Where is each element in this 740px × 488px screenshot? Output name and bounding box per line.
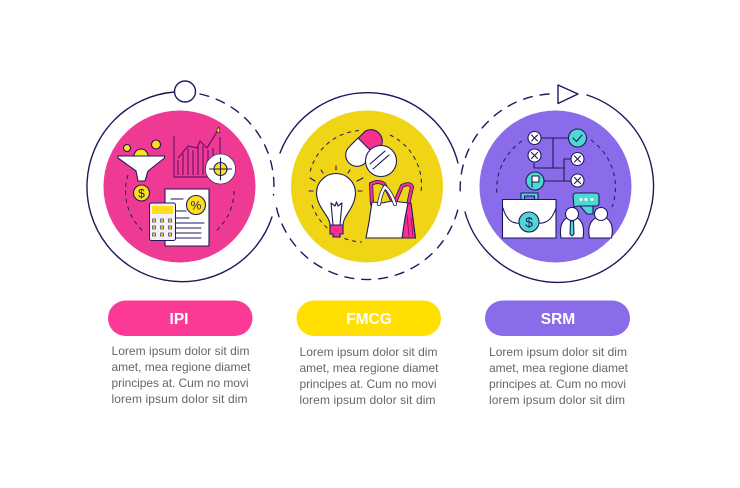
column: IPI label and text — [108, 300, 254, 406]
icon: dashed orbit — [310, 130, 421, 242]
icon: dashed orbit — [497, 140, 615, 207]
icon: calculator — [150, 203, 176, 240]
icon: two people talking — [560, 193, 612, 238]
pill: IPI — [108, 300, 252, 336]
column: SRM label and text — [485, 300, 631, 407]
text block: SRM: amet, mea regione diamet — [489, 361, 629, 375]
icon: growth chart with target — [174, 127, 236, 184]
icon: dashed orbit — [126, 175, 234, 231]
pill: SRM: SRM — [541, 311, 575, 328]
icon: briefcase with coin: $ — [525, 214, 533, 230]
pill: FMCG — [296, 300, 441, 336]
text block: IPI: Lorem ipsum dolor sit dim — [112, 344, 250, 358]
text block: IPI: amet, mea regione diamet — [112, 360, 251, 374]
text block: FMCG: amet, mea regione diamet — [300, 361, 439, 375]
icon: decision tree — [526, 129, 586, 190]
text block: IPI: principes at. Cum no movi — [112, 376, 248, 390]
icon: sales funnel with coins: $ — [138, 186, 145, 200]
pill: IPI: IPI — [170, 311, 188, 328]
icon: capsule and tablet — [346, 130, 396, 176]
pill: FMCG: FMCG — [346, 311, 392, 328]
text block: FMCG: principes at. Cum no movi — [300, 377, 436, 391]
icon: sales funnel with coins — [118, 140, 164, 201]
text block: IPI: lorem ipsum dolor sit dim — [112, 392, 248, 406]
text block: SRM: lorem ipsum dolor sit dim — [489, 393, 625, 407]
flow ring: first step — [87, 81, 274, 282]
text block: FMCG: lorem ipsum dolor sit dim — [300, 393, 436, 407]
panel: IPI circle — [104, 110, 256, 262]
text block: SRM: principes at. Cum no movi — [489, 377, 626, 391]
icon: document with percent: % — [191, 198, 202, 212]
flow ring: second step — [276, 93, 458, 280]
icon: document with percent — [165, 189, 209, 246]
flow ring: third step — [460, 85, 654, 282]
pill: SRM — [485, 300, 630, 336]
icon: light bulb — [309, 166, 363, 237]
text block: FMCG: Lorem ipsum dolor sit dim — [300, 345, 438, 359]
panel: SRM circle — [480, 110, 632, 262]
icon: shopping bag — [366, 182, 416, 238]
icon: briefcase with coin — [502, 193, 556, 238]
panel: FMCG circle — [291, 110, 443, 262]
column: FMCG label and text — [296, 300, 442, 407]
text block: SRM: Lorem ipsum dolor sit dim — [489, 345, 627, 359]
